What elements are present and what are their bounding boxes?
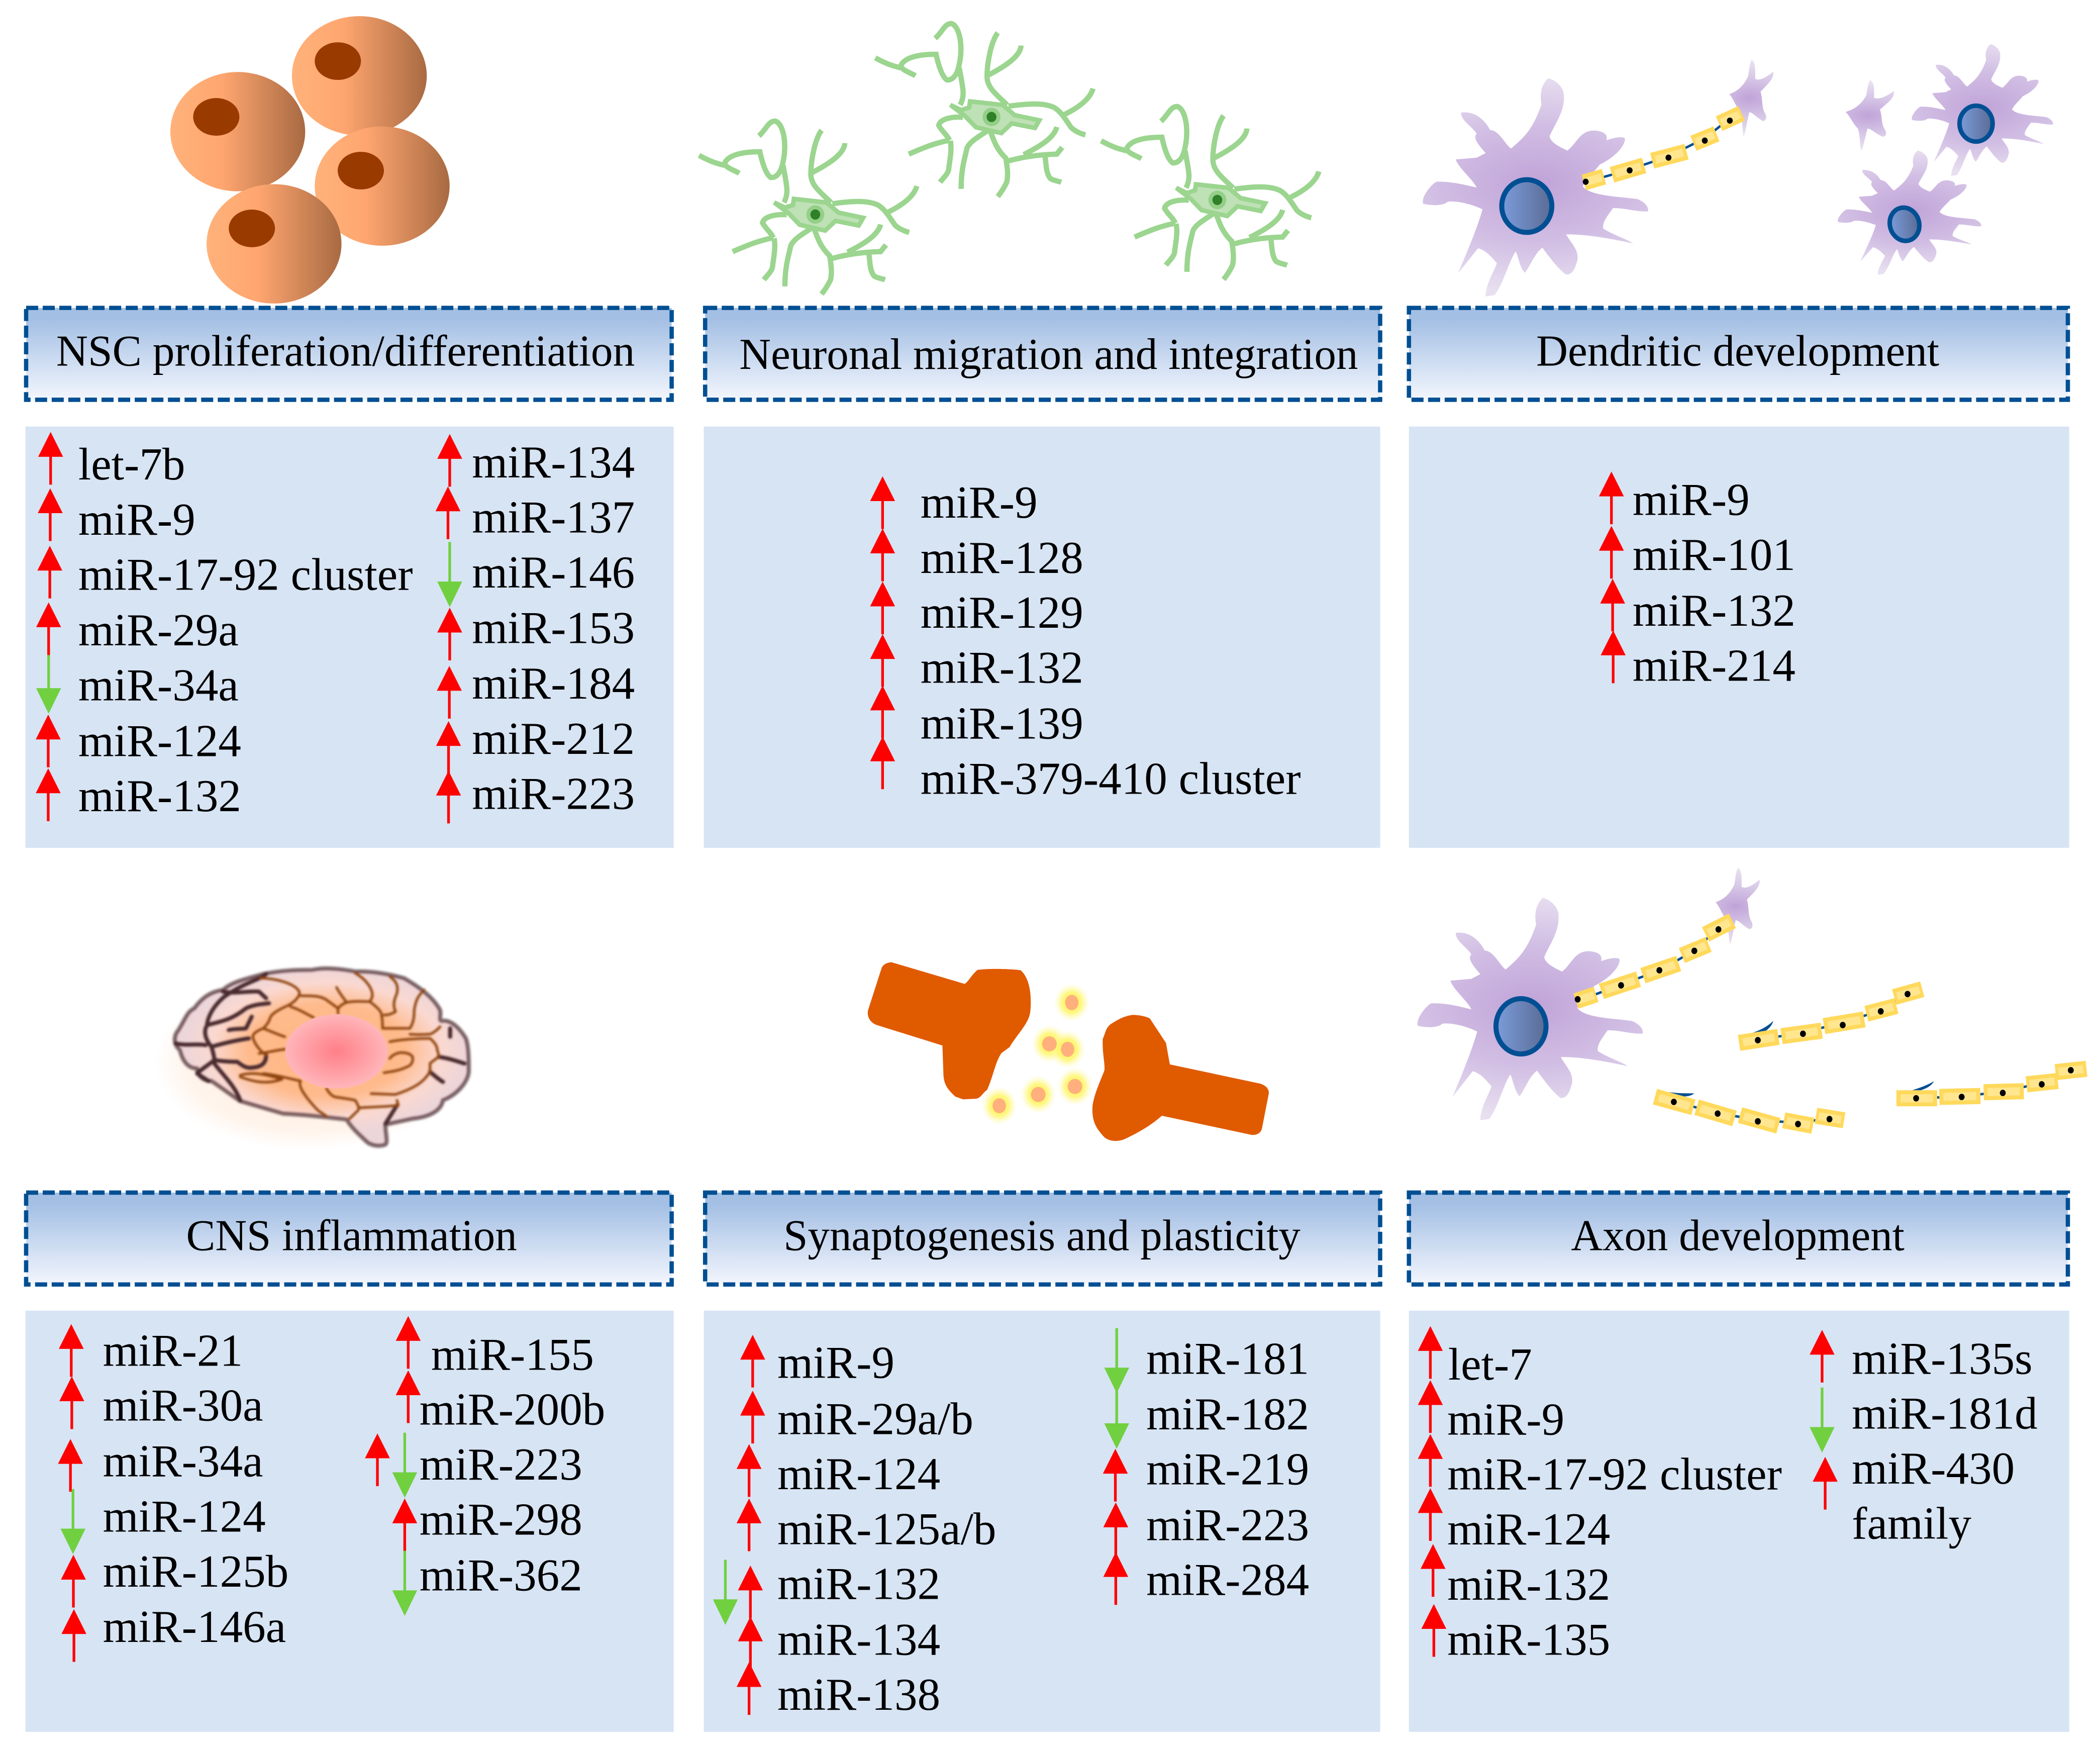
icon: neuron with axons [1418,867,2086,1127]
icon: inflammation focus [285,1014,388,1089]
item: miR-200b up [396,1371,605,1435]
item: miR-219 up: miR-219 [1146,1443,1309,1495]
item: miR-146 down: miR-146 [472,547,635,598]
item: miR-29a/b up: miR-29a/b [777,1393,973,1444]
item: miR-101 up: miR-101 [1633,529,1795,580]
item: miR-184 up [437,658,635,719]
item: miR-379-410 cluster up: miR-379-410 cluster [921,753,1301,804]
item: miR-132 up: miR-132 [921,642,1083,693]
item: miR-155 up: miR-155 [431,1329,594,1380]
icon: postsynaptic terminal [1092,1015,1269,1141]
item: miR-34a down [36,649,239,714]
item: miR-146a up: miR-146a [103,1601,286,1652]
item: miR-17-92 cluster up: miR-17-92 cluster [1447,1449,1782,1500]
item: miR-182 down: miR-182 [1146,1389,1309,1439]
item: miR-125b up [61,1546,288,1608]
item: let-7 up [1418,1326,1532,1390]
item: miR-214 up: miR-214 [1633,640,1795,691]
icon: vesicles [981,983,1093,1125]
item: miR-219 up [1103,1443,1309,1502]
item: miR-124 down: miR-124 [103,1491,266,1541]
item: miR-182 down [1104,1384,1309,1449]
item: miR-9 up: miR-9 [78,494,195,545]
item: miR-212 up: miR-212 [472,713,635,764]
item: miR-362 down: miR-362 [420,1550,582,1601]
item: miR-181 down: miR-181 [1146,1333,1309,1384]
item: miR-124 down [60,1489,266,1554]
item: miR-124 up: miR-124 [1447,1504,1610,1554]
heading: Axon development [1409,1193,2068,1285]
panel: Axon development list [1409,1311,2069,1732]
item: miR-17-92 cluster up: miR-17-92 cluster [78,549,413,600]
icon: neuron centre [875,24,1093,197]
item: miR-128 up: miR-128 [921,532,1083,583]
heading: Synaptogenesis and plasticity [705,1193,1380,1285]
heading: Neuronal migration and integration [705,308,1380,400]
item: miR-155 up [396,1316,594,1380]
item: miR-30a up: miR-30a [103,1380,263,1431]
item: miR-132 up: miR-132 [1447,1559,1610,1610]
heading: NSC proliferation/differentiation [26,308,672,400]
heading: CNS inflammation: CNS inflammation [186,1212,517,1260]
item: miR-223 up and down: miR-223 [420,1439,582,1490]
heading: Synaptogenesis and plasticity: Synaptogenesis and plasticity [783,1212,1301,1260]
item: let-7b up: let-7b [78,439,185,490]
item: miR-9 up: miR-9 [1633,474,1750,525]
item: miR-132 up: miR-132 [1633,585,1795,636]
panel: Synaptogenesis list [704,1311,1380,1732]
item: miR-135s up: miR-135s [1852,1333,2033,1384]
item: miR-125a/b up: miR-125a/b [777,1503,996,1554]
item: miR-284 up: miR-284 [1146,1554,1309,1605]
item: miR-138 up: miR-138 [777,1669,940,1720]
item: miR-430 family up: family [1852,1498,1971,1549]
panel: NSC proliferation list [26,427,674,848]
item: miR-124 up: miR-124 [777,1448,940,1499]
item: miR-223 up: miR-223 [1146,1499,1309,1550]
item: miR-9 up [870,476,1038,529]
item: miR-129 up [870,581,1083,638]
item: miR-181d down [1810,1388,2038,1452]
icon: migrating neurons [699,24,1319,294]
item: miR-223 up and down [365,1433,582,1498]
panel: CNS inflammation list [26,1311,674,1732]
item: miR-132 up [870,634,1083,693]
item: miR-132 up [1421,1544,1610,1610]
heading: Axon development: Axon development [1571,1212,1905,1260]
item: miR-9 up: miR-9 [777,1337,894,1388]
item: miR-298 up: miR-298 [420,1494,582,1545]
item: miR-21 up: miR-21 [103,1325,243,1376]
item: miR-9 up: miR-9 [1447,1394,1564,1444]
item: miR-137 up: miR-137 [472,492,635,543]
icon: synapse [868,962,1269,1141]
item: miR-134 up: miR-134 [777,1614,940,1665]
item: miR-181d down: miR-181d [1852,1388,2038,1439]
item: miR-146a up [61,1601,286,1662]
item: miR-135 up: miR-135 [1447,1614,1610,1665]
item: miR-124 up: miR-124 [78,715,241,766]
item: miR-134 up: miR-134 [472,437,635,488]
heading: Dendritic development: Dendritic development [1536,327,1939,375]
item: miR-223 up: miR-223 [472,768,635,819]
item: miR-430 family up [1813,1443,2015,1549]
item: miR-379-410 cluster up [870,736,1301,804]
item: miR-132 up: miR-132 [78,770,241,821]
item: miR-124 up [1418,1488,1610,1554]
icon: neuron left [699,121,917,294]
icon: neurons with dendrites [1423,44,2053,297]
item: miR-181 down [1104,1328,1309,1393]
item: miR-184 up: miR-184 [472,658,635,709]
item: miR-139 up: miR-139 [921,698,1083,749]
item: let-7 up: let-7 [1448,1339,1532,1390]
heading: CNS inflammation [26,1193,672,1285]
item: miR-125b up: miR-125b [103,1546,288,1597]
panel: Neuronal migration list [704,427,1380,848]
item: let-7b up [38,432,185,490]
item: miR-34a up: miR-34a [103,1436,263,1487]
item: miR-132 up and down [713,1559,940,1625]
heading: Dendritic development [1409,308,2068,400]
item: miR-212 up [436,713,635,774]
heading: NSC proliferation/differentiation: NSC proliferation/differentiation [56,327,635,375]
panel: Dendritic development list [1409,427,2069,848]
item: miR-362 down [392,1550,582,1616]
item: miR-146 down [437,542,635,607]
icon: neuron right [1101,107,1319,279]
icon: neural stem cells cluster [170,16,450,304]
item: miR-200b up: miR-200b [420,1384,605,1435]
item: miR-153 up: miR-153 [472,602,635,653]
item: miR-430 family up: miR-430 [1852,1443,2015,1494]
item: miR-34a down: miR-34a [78,659,239,710]
heading: Neuronal migration and integration: Neuronal migration and integration [739,330,1358,379]
item: miR-139 up [870,686,1083,749]
item: miR-129 up: miR-129 [921,587,1083,638]
icon: presynaptic terminal [868,962,1031,1099]
icon: brain with inflammation [154,968,469,1150]
item: miR-132 up and down: miR-132 [777,1559,940,1609]
item: miR-9 up [1418,1380,1564,1444]
item: miR-29a up: miR-29a [78,605,239,655]
item: miR-9 up [38,489,195,545]
item: miR-9 up: miR-9 [921,477,1038,528]
